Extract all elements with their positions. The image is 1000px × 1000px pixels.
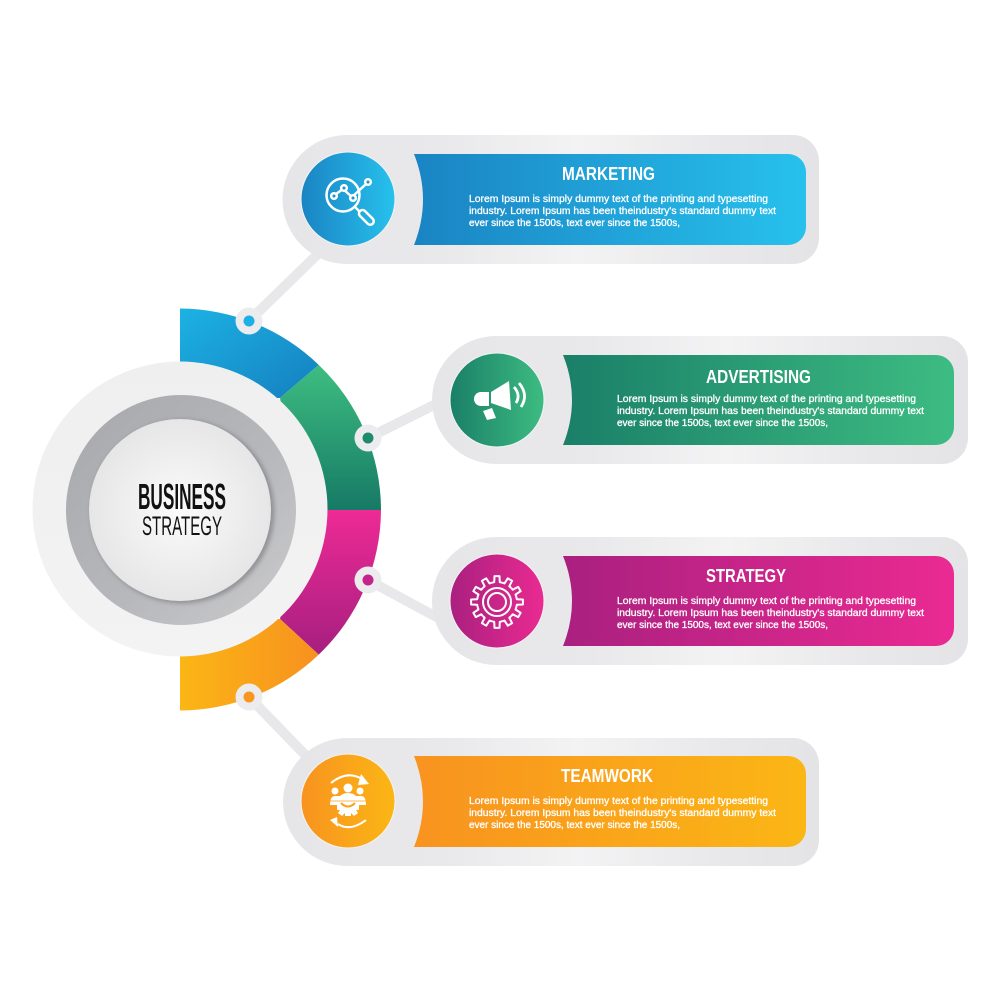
hub title: [138, 476, 226, 541]
banner: [563, 556, 954, 646]
body text: Lorem Ipsum is simply dummy text of the printing and typesetting: [469, 796, 768, 807]
body text: [617, 394, 924, 429]
icon: magnifier chart: [326, 178, 375, 226]
pill background: [282, 135, 819, 264]
hub title: STRATEGY: [142, 511, 222, 541]
connector lines: [249, 250, 442, 765]
dot: blue: [236, 308, 262, 334]
connector dots: [236, 308, 382, 710]
body text: industry. Lorem Ipsum has been theindustry's standard dummy text: [469, 808, 776, 819]
heading: STRATEGY: [706, 566, 786, 586]
body text: Lorem Ipsum is simply dummy text of the printing and typesetting: [617, 596, 916, 607]
dot: orange: [236, 684, 262, 710]
heading: TEAMWORK: [561, 766, 653, 786]
centre hub: BUSINESS: [138, 476, 226, 517]
panel: marketing: [282, 135, 819, 264]
banner: [414, 154, 806, 245]
panel: strategy: [432, 537, 968, 665]
dot: magenta: [354, 566, 382, 594]
outer disk: [32, 362, 328, 656]
icon circle: [450, 554, 544, 648]
icon circle: [301, 152, 395, 246]
body text: [469, 194, 776, 229]
body text: [469, 796, 776, 831]
segment: blue: [180, 308, 319, 400]
icon: megaphone: [474, 381, 525, 420]
body text: Lorem Ipsum is simply dummy text of the printing and typesetting: [469, 194, 768, 205]
heading: MARKETING: [562, 164, 655, 184]
body text: ever since the 1500s, text ever since the 1500s,: [469, 218, 680, 229]
body text: ever since the 1500s, text ever since the 1500s,: [617, 418, 828, 429]
segment: orange: [180, 619, 319, 710]
body text: [617, 596, 924, 631]
body text: industry. Lorem Ipsum has been theindustry's standard dummy text: [617, 406, 924, 417]
icon: team gear: [330, 774, 369, 827]
pill background: [283, 738, 819, 866]
body text: industry. Lorem Ipsum has been theindustry's standard dummy text: [469, 206, 776, 217]
body text: ever since the 1500s, text ever since the 1500s,: [617, 620, 828, 631]
semicircle colour segments: [180, 308, 381, 710]
banner: [414, 756, 806, 847]
heading: ADVERTISING: [706, 367, 811, 387]
inner circle: [89, 419, 271, 601]
dot: green: [354, 424, 382, 452]
segment: green: [280, 365, 381, 510]
body text: Lorem Ipsum is simply dummy text of the printing and typesetting: [617, 394, 916, 405]
panel: advertising: [432, 336, 968, 464]
icon circle: [301, 754, 395, 848]
panel: teamwork: [283, 738, 819, 866]
body text: ever since the 1500s, text ever since the 1500s,: [469, 820, 680, 831]
pill background: [432, 537, 968, 665]
grey ring: [66, 395, 296, 625]
centre hub: [32, 362, 328, 656]
banner: [563, 355, 954, 445]
body text: industry. Lorem Ipsum has been theindustry's standard dummy text: [617, 608, 924, 619]
pill background: [432, 336, 968, 464]
segment: magenta: [280, 510, 381, 655]
icon circle: [450, 353, 544, 447]
icon: gear: [471, 576, 523, 628]
